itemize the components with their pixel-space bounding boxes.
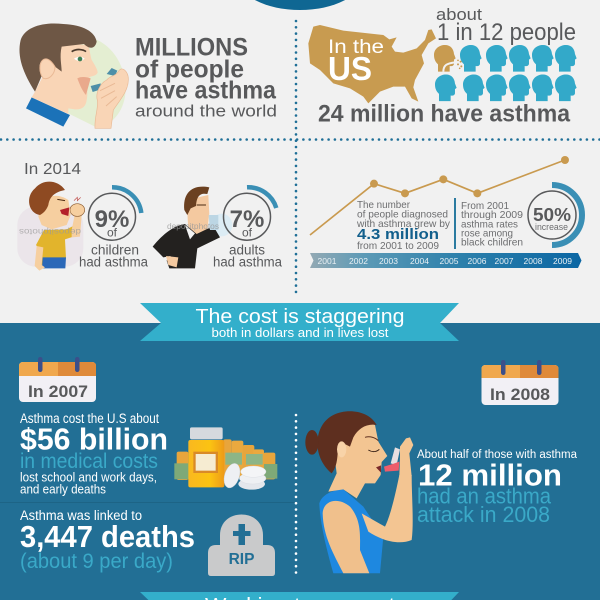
icon: adult man with inhaler: [153, 187, 232, 268]
background: light upper section: [0, 0, 600, 323]
text: rates among black children: rose among: [461, 228, 513, 240]
top arc: [238, 0, 362, 10]
text: people diagnosed grew by 4.3 million: with asthma grew by: [356, 218, 451, 230]
chart: year timeline arrow: 2001: [318, 256, 337, 266]
text: people diagnosed grew by 4.3 million: 4.3 million: [357, 226, 439, 243]
heading: 24 million have asthma: 24 million have asthma: [318, 100, 571, 128]
text: 12 million had an attack: attack in 2008: [417, 502, 550, 527]
text: 12 million had an attack: [417, 449, 578, 527]
text: asthma cost about 56 billion: and early deaths: [20, 482, 106, 496]
chart: year timeline arrow: 2005: [440, 256, 459, 266]
text: asthma cost about 56 billion: lost school and work days,: [20, 470, 157, 484]
heading: millions of people have asthma: MILLIONS: [135, 34, 248, 62]
chart: line of asthma diagnoses: [310, 156, 569, 235]
text: children had asthma: had asthma: [79, 254, 148, 270]
icon: man using inhaler: [19, 23, 128, 128]
panel: millions worldwide: [19, 23, 277, 128]
chart: year timeline arrow: 2002: [349, 256, 368, 266]
text: rates among black children: asthma rates: [461, 218, 518, 230]
text: depositphotos watermark, mirrored: depositphotos: [19, 227, 81, 236]
banner: the cost is staggering: [140, 303, 459, 341]
text: depositphotos watermark: depositphotos: [167, 222, 219, 231]
heading: millions of people have asthma: have asthma: [135, 76, 277, 104]
text: adults had asthma: adults: [229, 242, 265, 258]
heading: millions of people have asthma: [135, 34, 277, 104]
chart: 9 percent ring: of: [107, 226, 118, 240]
icon: coughing boy: [17, 182, 85, 271]
icon: calendar in 2008: In 2008: [490, 385, 550, 404]
icon: pill bottle, cash and pills: [174, 427, 277, 490]
chart: year timeline arrow: 2008: [524, 256, 543, 266]
chart: year timeline arrow: 2006: [468, 256, 487, 266]
text: asthma cost about 56 billion: in medical costs: [20, 450, 158, 473]
panel: in 2007 costs: [0, 357, 296, 576]
text: asthma cost about 56 billion: $56 billion: [20, 422, 168, 456]
chart: 50 percent increase ring: increase: [535, 222, 568, 232]
panel: in the US: [308, 5, 577, 128]
icon: woman using inhaler: [305, 411, 413, 573]
text: in the US: [328, 37, 384, 87]
chart: 7 percent ring: 7%: [230, 206, 264, 233]
text: rates among black children: From 2001: [461, 200, 509, 212]
text: linked to 3,447 deaths: [20, 508, 195, 573]
text: asthma cost about 56 billion: [20, 411, 168, 496]
chart: year timeline arrow: 2004: [410, 256, 429, 266]
text: in the US: In the: [328, 37, 384, 58]
text: people diagnosed grew by 4.3 million: of people diagnosed: [357, 208, 448, 220]
text: adults had asthma: [213, 242, 282, 270]
icon: calendar in 2008: [482, 360, 558, 405]
text: linked to 3,447 deaths: 3,447 deaths: [20, 519, 195, 554]
chart: year timeline arrow: 2003: [379, 256, 398, 266]
icon: row of people heads, one in 12 highlighted: [434, 45, 577, 101]
text: children had asthma: [79, 242, 148, 270]
heading: in 2014: In 2014: [24, 161, 81, 178]
chart: 50 percent increase ring: 50%: [533, 205, 571, 225]
icon: calendar in 2007: [19, 357, 96, 402]
background: blue lower section: [0, 323, 600, 600]
text: children had asthma: children: [91, 242, 139, 258]
text: linked to 3,447 deaths: (about 9 per day): [20, 550, 173, 573]
chart: year timeline arrow: 2007: [495, 256, 514, 266]
chart: 7 percent ring: of: [242, 226, 253, 240]
chart: year timeline arrow: 2009: [553, 256, 572, 266]
text: asthma cost about 56 billion: Asthma cost the U.S about: [20, 411, 159, 426]
panel: in 2014: [17, 161, 282, 271]
text: rates among black children: black children: [461, 236, 523, 248]
chart: 9 percent ring: 9%: [95, 206, 129, 233]
chart: 7 percent ring: [224, 187, 276, 240]
panel: in 2008 attacks: [305, 360, 578, 573]
text: about 1 in 12 people: [436, 5, 576, 46]
icon: US map: [308, 25, 436, 103]
text: about 1 in 12 people: about: [436, 5, 482, 24]
text: rates among black children: through 2009: [461, 209, 523, 221]
text: people diagnosed grew by 4.3 million: from 2001 to 2009: [357, 240, 439, 252]
text: around the world: around the world: [135, 102, 277, 120]
icon: RIP tombstone: [208, 514, 275, 576]
text: in the US: US: [328, 50, 372, 87]
banner: the cost is staggering: both in dollars and in lives lost: [212, 326, 389, 340]
chart: 9 percent ring: [88, 187, 141, 240]
icon: tan head with affected airway: [434, 45, 462, 72]
text: about 1 in 12 people: 1 in 12 people: [437, 19, 576, 46]
chart: year timeline arrow: [310, 253, 582, 268]
text: people diagnosed grew by 4.3 million: The number: [357, 199, 410, 211]
text: rates among black children: [461, 200, 523, 248]
heading: millions of people have asthma: of people: [135, 56, 244, 84]
text: 12 million had an attack: had an asthma: [417, 484, 552, 508]
chart: 50 percent increase ring: [528, 185, 582, 245]
banner: the cost is staggering: The cost is staggering: [196, 305, 404, 328]
banner: working to prevent: [140, 592, 459, 600]
text: people diagnosed grew by 4.3 million: [356, 199, 451, 252]
text: 12 million had an attack: About half of those with asthma: [417, 449, 578, 461]
icon: calendar in 2007: In 2007: [28, 382, 88, 401]
text: linked to 3,447 deaths: Asthma was linked to: [20, 508, 142, 523]
text: adults had asthma: had asthma: [213, 254, 282, 270]
panel: trend 2001 to 2009: [310, 156, 582, 268]
text: 12 million had an attack: 12 million: [418, 458, 562, 492]
icon: RIP tombstone: RIP: [229, 551, 254, 568]
